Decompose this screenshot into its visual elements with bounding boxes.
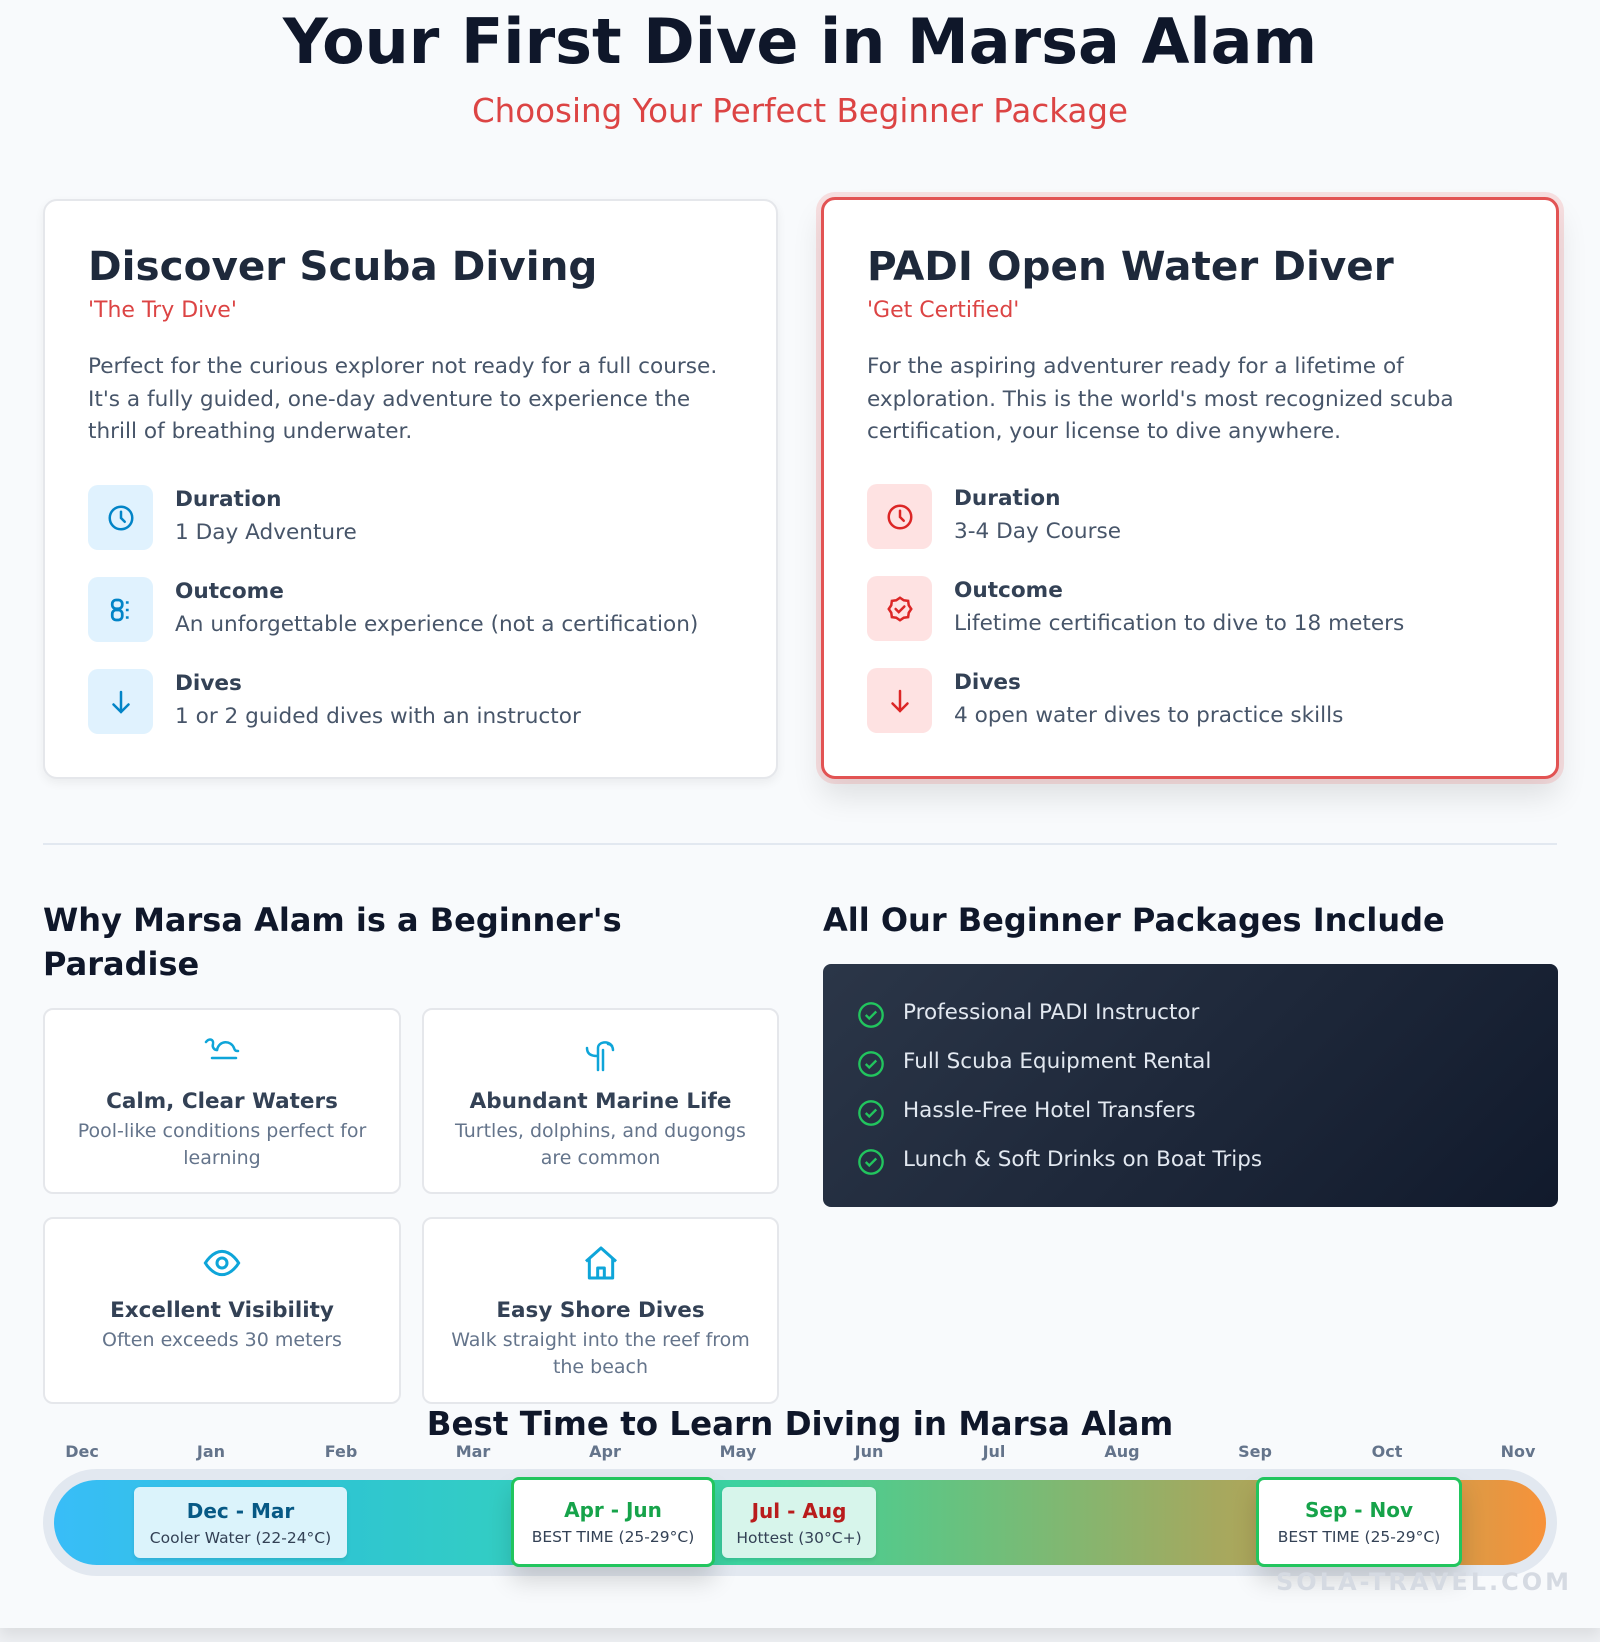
item: duration: Duration [175,487,281,512]
icon: arrow down [88,669,153,734]
feature: calm waters: Calm, Clear Waters [106,1089,338,1114]
item: lunch [858,1147,1262,1175]
feature: shore dives: Easy Shore Dives [496,1298,705,1323]
icon: coral [586,1041,614,1072]
icon: clock [867,484,932,549]
icon: waves [204,1038,240,1060]
item: transfers [858,1098,1196,1126]
description: For the aspiring adventurer ready for a lifetime of exploration. This is the world's most recognized scuba certification, your license to dive anywhere. [867,354,1454,444]
watermark: SOLA-TRAVEL.COM [1276,1568,1572,1596]
feature: marine life [422,1008,779,1194]
period: apr-jun best: BEST TIME (25-29°C) [532,1528,694,1546]
feature: calm waters [43,1008,401,1194]
panel: included list [823,964,1558,1207]
subtitle: Choosing Your Perfect Beginner Package [472,92,1128,130]
feature: calm waters: Pool-like conditions perfect for learning [78,1120,366,1169]
heading: padi open water diver: PADI Open Water Diver [867,242,1394,290]
tagline: 'The Try Dive' [88,298,237,323]
period: dec-mar: Cooler Water (22-24°C) [150,1529,331,1547]
icon: house [585,1246,617,1280]
feature: marine life: Abundant Marine Life [470,1089,731,1114]
month labels: Oct [1372,1442,1402,1461]
item: duration: Duration [954,486,1060,511]
period: apr-jun best [511,1477,715,1567]
item: instructor [858,1000,1200,1028]
feature: visibility: Often exceeds 30 meters [102,1329,342,1351]
month labels: Mar [456,1442,490,1461]
period: jul-aug: Jul - Aug [752,1499,846,1523]
month labels: May [720,1442,756,1461]
month labels: Jan [197,1442,225,1461]
item: dives: Dives [175,671,242,696]
feature: shore dives [422,1217,779,1404]
item: duration [88,485,357,550]
feature: marine life: Turtles, dolphins, and dugongs are common [455,1120,746,1169]
item: dives [88,669,581,734]
month labels: Aug [1104,1442,1140,1461]
period: jul-aug: Hottest (30°C+) [736,1529,862,1547]
item: dives: 1 or 2 guided dives with an instructor [175,704,581,729]
item: outcome: An unforgettable experience (not a certification) [175,612,698,637]
month labels: Jul [983,1442,1005,1461]
period: dec-mar [134,1487,347,1558]
item: equipment [858,1049,1211,1077]
period: sep-nov best: Sep - Nov [1305,1498,1413,1522]
feature: visibility: Excellent Visibility [110,1298,334,1323]
icon: arrow down [867,668,932,733]
item: outcome: Outcome [175,579,284,604]
item: outcome [867,576,1404,641]
feature: visibility [43,1217,401,1404]
panel: included list: Lunch & Soft Drinks on Boat Trips [903,1147,1262,1172]
item: dives [867,668,1343,733]
icon: eye [204,1250,240,1276]
item: outcome [88,577,698,642]
panel: discover scuba diving [43,199,778,779]
item: duration [867,484,1121,549]
panel: included list: Full Scuba Equipment Rental [903,1049,1211,1074]
timeline bar [43,1469,1557,1576]
item: duration: 3-4 Day Course [954,519,1121,544]
panel: included list: Hassle-Free Hotel Transfers [903,1098,1196,1123]
period: dec-mar: Dec - Mar [187,1499,294,1523]
timeline [65,1442,1536,1461]
panel: included list: Professional PADI Instructor [903,1000,1199,1025]
icon: badge [88,577,153,642]
title: Your First Dive in Marsa Alam [283,5,1317,78]
period: sep-nov best: BEST TIME (25-29°C) [1278,1528,1440,1546]
description: Perfect for the curious explorer not ready for a full course. It's a fully guided, one-day adventure to experience the thrill of breathing underwater. [88,354,717,444]
period: sep-nov best [1256,1477,1462,1567]
icon: clock [88,485,153,550]
heading: best time: Best Time to Learn Diving in Marsa Alam [427,1405,1173,1443]
item: dives: Dives [954,670,1021,695]
month labels: Dec [65,1442,99,1461]
tagline: 'Get Certified' [867,298,1019,323]
heading: why marsa alam: Why Marsa Alam is a Beginner's Paradise [43,901,622,983]
month labels: Sep [1238,1442,1272,1461]
item: dives: 4 open water dives to practice skills [954,703,1343,728]
panel: padi open water [821,197,1559,779]
month labels: Nov [1501,1442,1535,1461]
month labels: Jun [855,1442,883,1461]
month labels: Feb [325,1442,357,1461]
item: outcome: Outcome [954,578,1063,603]
item: outcome: Lifetime certification to dive to 18 meters [954,611,1404,636]
feature: shore dives: Walk straight into the reef from the beach [451,1329,750,1378]
item: duration: 1 Day Adventure [175,520,357,545]
heading: discover scuba diving: Discover Scuba Diving [88,242,597,290]
period: apr-jun best: Apr - Jun [564,1498,662,1522]
month labels: Apr [589,1442,621,1461]
period: jul-aug [722,1487,876,1558]
icon: certified badge [867,576,932,641]
heading: packages include: All Our Beginner Packages Include [823,901,1445,939]
